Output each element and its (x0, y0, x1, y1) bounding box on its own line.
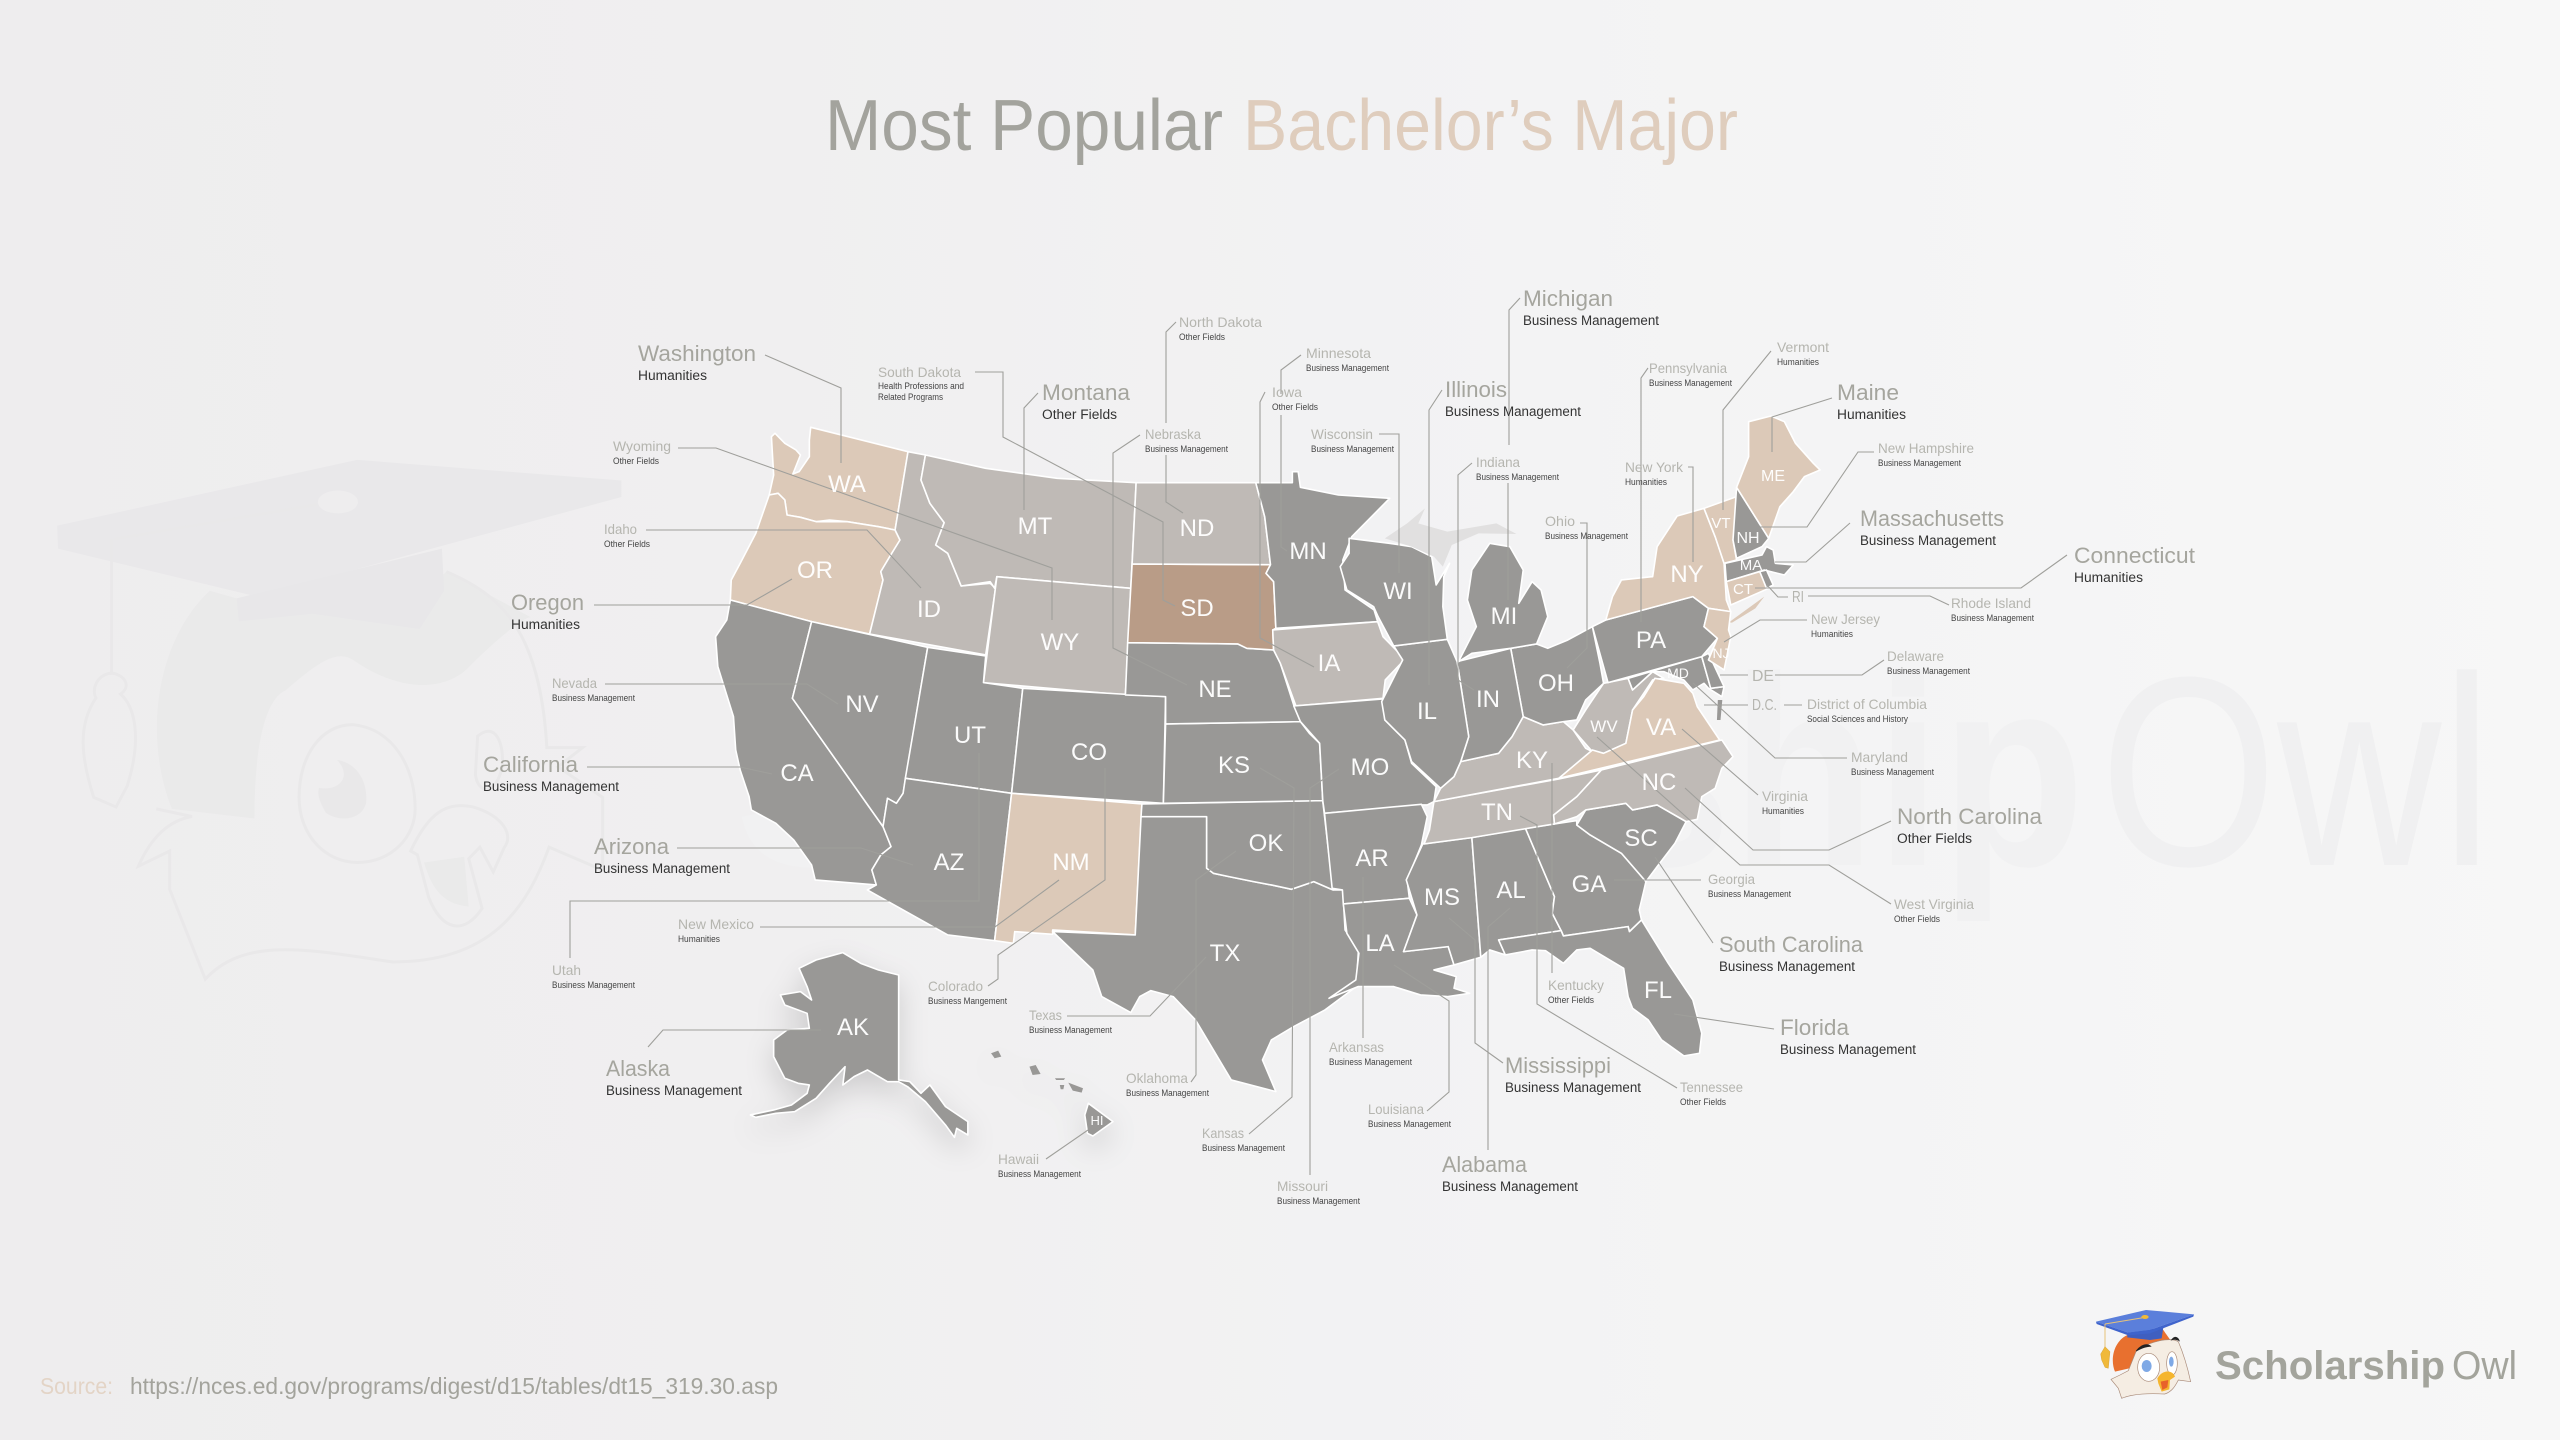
label Florida (1780, 1015, 1916, 1057)
state WV (1573, 672, 1664, 753)
label West Virginia (1894, 896, 1974, 924)
state CT (1726, 572, 1769, 605)
logo: ScholarshipOwl (2096, 1310, 2517, 1398)
state abbreviations: GA (1572, 871, 1606, 898)
label Washington: Washington (638, 341, 756, 366)
label Mississippi: Business Management (1505, 1080, 1641, 1095)
state abbreviations: WV (1590, 717, 1618, 736)
state abbreviations: MT (1018, 513, 1053, 540)
label Utah: Business Management (552, 980, 635, 990)
state WY (983, 577, 1131, 695)
state abbreviations: IA (1318, 650, 1340, 677)
label Delaware (1887, 648, 1970, 676)
label Nebraska: Business Management (1145, 444, 1228, 454)
label Arizona: Business Management (594, 861, 730, 876)
source line: Source: (40, 1373, 113, 1399)
source line: https://nces.ed.gov/programs/digest/d15/tables/dt15_319.30.asp (130, 1373, 778, 1399)
label Illinois: Illinois (1445, 377, 1507, 402)
label Maryland (1851, 749, 1934, 777)
label Maine: Humanities (1837, 407, 1906, 422)
state abbreviations: WY (1041, 629, 1079, 656)
label Colorado: Business Mangement (928, 996, 1007, 1006)
label Tennessee (1680, 1079, 1743, 1107)
label South Dakota (878, 364, 964, 402)
state abbreviations: TN (1481, 799, 1513, 826)
state abbreviations: FL (1644, 977, 1672, 1004)
label Mississippi (1505, 1053, 1641, 1095)
label District of Columbia (1807, 696, 1927, 724)
label Nevada: Nevada (552, 675, 597, 691)
state abbreviations: MO (1351, 754, 1389, 781)
label Louisiana: Business Management (1368, 1119, 1451, 1129)
label Oklahoma: Oklahoma (1126, 1070, 1188, 1086)
large state labels (483, 286, 2195, 1194)
state NM (995, 793, 1142, 943)
label New York: Humanities (1625, 477, 1667, 487)
label West Virginia: West Virginia (1894, 896, 1974, 912)
state NY long island (1729, 597, 1764, 623)
label South Carolina: South Carolina (1719, 932, 1864, 957)
state MD (1628, 657, 1724, 697)
state abbreviations: MS (1424, 884, 1460, 911)
label Alabama: Business Management (1442, 1179, 1578, 1194)
label Montana: Other Fields (1042, 407, 1117, 422)
map: Alaska and Hawaii with shadow (750, 953, 1113, 1137)
label Vermont: Humanities (1777, 357, 1819, 367)
state abbreviations: MD (1667, 665, 1689, 681)
label North Dakota (1179, 314, 1262, 342)
label Georgia: Business Management (1708, 889, 1791, 899)
label Oregon (511, 590, 584, 632)
label Tennessee: Other Fields (1680, 1097, 1726, 1107)
label Minnesota: Business Management (1306, 363, 1389, 373)
state abbreviations: AK (837, 1014, 869, 1041)
label Oregon: Oregon (511, 590, 584, 615)
label Wisconsin (1311, 426, 1394, 454)
state abbreviations: NJ (1712, 645, 1730, 661)
label New Hampshire: Business Management (1878, 458, 1961, 468)
label Maryland: Maryland (1851, 749, 1908, 765)
label Nevada: Business Management (552, 693, 635, 703)
state abbreviations: OR (797, 557, 833, 584)
map: contiguous states east (1294, 416, 1820, 1056)
label Indiana: Business Management (1476, 472, 1559, 482)
state MT (921, 455, 1136, 588)
state TN (1424, 770, 1601, 844)
label District of Columbia: Social Sciences and History (1807, 714, 1908, 724)
state abbreviations: NY (1670, 561, 1704, 588)
label Mississippi: Mississippi (1505, 1053, 1611, 1078)
label California: California (483, 752, 579, 777)
state abbreviations: NE (1198, 676, 1232, 703)
state WI (1340, 538, 1450, 646)
label Ohio (1545, 513, 1628, 541)
label Texas: Texas (1029, 1007, 1062, 1023)
label Idaho (604, 521, 650, 549)
state abbreviations: HI (1090, 1113, 1104, 1128)
state abbreviations: VT (1711, 515, 1731, 532)
state abbreviations: UT (954, 722, 986, 749)
label Ohio: Business Management (1545, 531, 1628, 541)
label Maine (1837, 380, 1906, 422)
label Michigan (1523, 286, 1659, 328)
label Nebraska: Nebraska (1145, 426, 1201, 442)
label Arizona (594, 834, 730, 876)
label Kansas: Kansas (1202, 1125, 1244, 1141)
label Virginia (1762, 788, 1808, 816)
state abbreviations: AR (1355, 845, 1389, 872)
map: contiguous states west (716, 427, 1403, 1092)
state NV (792, 622, 928, 827)
label Hawaii: Business Management (998, 1169, 1081, 1179)
small state labels (552, 314, 2034, 1206)
label Connecticut: Humanities (2074, 570, 2143, 585)
label Georgia: Georgia (1708, 871, 1755, 887)
state SC (1577, 803, 1686, 882)
label Alaska: Business Management (606, 1083, 742, 1098)
label Kentucky: Kentucky (1548, 977, 1604, 993)
label Arkansas (1329, 1039, 1412, 1067)
label Wyoming (613, 438, 671, 466)
watermark: brand wordmark: Owl (2100, 622, 2492, 923)
state ND (1132, 483, 1270, 565)
label New Jersey: New Jersey (1811, 611, 1880, 627)
state RI (1760, 570, 1773, 588)
label Connecticut: Connecticut (2074, 543, 2195, 568)
label Maine: Maine (1837, 380, 1899, 405)
label Colorado: Colorado (928, 978, 983, 994)
label Louisiana: Louisiana (1368, 1101, 1424, 1117)
label Texas: Business Management (1029, 1025, 1112, 1035)
label Michigan: Business Management (1523, 313, 1659, 328)
state HI islands (991, 1051, 1083, 1093)
label Missouri: Missouri (1277, 1178, 1328, 1194)
state abbreviations: ME (1761, 468, 1785, 485)
state FL (1499, 920, 1702, 1056)
label Georgia (1708, 871, 1791, 899)
state NJ (1704, 608, 1731, 670)
label Maryland: Business Management (1851, 767, 1934, 777)
label Minnesota (1306, 345, 1389, 373)
label DE: DE (1752, 668, 1774, 685)
label Massachusetts: Massachusetts (1860, 506, 2004, 531)
label South Carolina: Business Management (1719, 959, 1855, 974)
label Virginia: Virginia (1762, 788, 1808, 804)
state UT (905, 647, 1023, 793)
label Massachusetts: Business Management (1860, 533, 1996, 548)
state abbreviations: SC (1624, 825, 1658, 852)
label Kentucky: Other Fields (1548, 995, 1594, 1005)
label North Dakota: North Dakota (1179, 314, 1262, 330)
label Hawaii: Hawaii (998, 1151, 1039, 1167)
state abbreviations: OH (1538, 670, 1574, 697)
label Massachusetts (1860, 506, 2004, 548)
label New York: New York (1625, 459, 1684, 475)
state abbreviations: NV (845, 691, 879, 718)
label Iowa: Iowa (1272, 384, 1302, 400)
label Pennsylvania (1649, 360, 1732, 388)
label Ohio: Ohio (1545, 513, 1575, 529)
state IN (1457, 648, 1523, 762)
label Rhode Island: Rhode Island (1951, 595, 2031, 611)
label Montana: Montana (1042, 380, 1131, 405)
label Delaware: Delaware (1887, 648, 1944, 664)
logo wordmark: Scholarship (2215, 1344, 2445, 1388)
state NH (1733, 487, 1769, 558)
state VA eastern shore (1717, 700, 1722, 720)
label Washington: Humanities (638, 368, 707, 383)
watermark: brand wordmark: Scholarship (735, 622, 2085, 924)
icon: owl mascot (2096, 1310, 2194, 1398)
state abbreviations: NM (1052, 849, 1090, 876)
state abbreviations: KY (1516, 747, 1548, 774)
state abbreviations: CO (1071, 739, 1107, 766)
logo wordmark light: Owl (2452, 1344, 2517, 1388)
state OK (1141, 801, 1333, 890)
state MN (1256, 472, 1390, 628)
label Rhode Island (1951, 595, 2034, 623)
state abbreviations: SD (1180, 595, 1214, 622)
state PA (1592, 597, 1717, 683)
label Texas (1029, 1007, 1112, 1035)
label North Carolina (1897, 804, 2043, 846)
label Utah: Utah (552, 962, 581, 978)
state MO (1294, 699, 1436, 813)
leader lines (570, 298, 2067, 1175)
title: Bachelor’s Major (1243, 86, 1738, 166)
label Alabama: Alabama (1442, 1152, 1528, 1177)
label South Carolina (1719, 932, 1864, 974)
label New Hampshire: New Hampshire (1878, 440, 1974, 456)
state VA (1559, 678, 1720, 778)
state LA (1329, 898, 1470, 998)
state GA (1525, 821, 1646, 936)
label Illinois: Business Management (1445, 404, 1581, 419)
label Oklahoma: Business Management (1126, 1088, 1209, 1098)
label Kansas: Business Management (1202, 1143, 1285, 1153)
state NE (1125, 643, 1300, 724)
state abbreviations: WI (1383, 578, 1413, 605)
state VT (1704, 497, 1737, 563)
state OR (730, 493, 900, 634)
label Connecticut (2074, 543, 2195, 585)
state abbreviations: OK (1249, 830, 1283, 857)
state AK (750, 953, 968, 1137)
label Louisiana (1368, 1101, 1451, 1129)
label Alaska: Alaska (606, 1056, 671, 1081)
state abbreviations (780, 468, 1785, 1128)
label Missouri: Business Management (1277, 1196, 1360, 1206)
label Alabama (1442, 1152, 1578, 1194)
label Idaho: Other Fields (604, 539, 650, 549)
state abbreviations: CA (780, 760, 814, 787)
label New Jersey (1811, 611, 1880, 639)
state abbreviations: NC (1642, 769, 1676, 796)
label South Dakota: South Dakota (878, 364, 961, 380)
state MS (1404, 838, 1481, 965)
state abbreviations: ID (917, 596, 941, 623)
label Virginia: Humanities (1762, 806, 1804, 816)
state ID (870, 452, 996, 655)
label Hawaii (998, 1151, 1081, 1179)
state AR (1325, 804, 1427, 904)
state abbreviations: LA (1365, 930, 1395, 957)
label New Mexico: Humanities (678, 934, 720, 944)
label Utah (552, 962, 635, 990)
label Colorado (928, 978, 1007, 1006)
label Nevada (552, 675, 635, 703)
label Iowa: Other Fields (1272, 402, 1318, 412)
state abbreviations: TX (1210, 940, 1240, 967)
label D.C.: D.C. (1752, 697, 1777, 714)
state abbreviations: AL (1496, 877, 1526, 904)
label Idaho: Idaho (604, 521, 637, 537)
state NC (1554, 740, 1733, 824)
state CA (716, 600, 891, 885)
state abbreviations: MN (1289, 538, 1327, 565)
label North Carolina: North Carolina (1897, 804, 2043, 829)
state abbreviations: CT (1733, 581, 1753, 598)
label Washington (638, 341, 756, 383)
label RI: RI (1792, 589, 1804, 606)
label New York (1625, 459, 1684, 487)
watermark: owl mascot (57, 460, 621, 979)
label Arkansas: Arkansas (1329, 1039, 1384, 1055)
label Tennessee: Tennessee (1680, 1079, 1743, 1095)
label California (483, 752, 619, 794)
label Illinois (1445, 377, 1581, 419)
state CO (1012, 688, 1166, 803)
label Wisconsin: Business Management (1311, 444, 1394, 454)
state abbreviations: MA (1740, 557, 1762, 574)
label Rhode Island: Business Management (1951, 613, 2034, 623)
label West Virginia: Other Fields (1894, 914, 1940, 924)
label Kentucky (1548, 977, 1604, 1005)
label California: Business Management (483, 779, 619, 794)
label South Dakota: Health Professions and (878, 381, 964, 391)
state abbreviations: IN (1476, 686, 1500, 713)
label Montana (1042, 380, 1131, 422)
state abbreviations: ND (1180, 515, 1214, 542)
state KY (1434, 717, 1592, 802)
state HI (1085, 1103, 1113, 1136)
state OH (1511, 627, 1604, 725)
label New Mexico: New Mexico (678, 916, 754, 932)
state IL (1382, 639, 1469, 788)
label North Carolina: Other Fields (1897, 831, 1972, 846)
state TX (1053, 817, 1358, 1092)
state abbreviations: MI (1491, 603, 1517, 630)
label North Dakota: Other Fields (1179, 332, 1225, 342)
state abbreviations: IL (1417, 698, 1437, 725)
state SD (1128, 564, 1276, 650)
label Vermont (1777, 339, 1829, 367)
label Arkansas: Business Management (1329, 1057, 1412, 1067)
state ME (1737, 416, 1820, 538)
state abbreviations: AZ (934, 849, 964, 876)
label Alaska (606, 1056, 742, 1098)
state abbreviations: KS (1218, 752, 1250, 779)
label Indiana (1476, 454, 1559, 482)
label Florida: Business Management (1780, 1042, 1916, 1057)
state KS (1163, 722, 1323, 803)
label New Mexico (678, 916, 754, 944)
label Arizona: Arizona (594, 834, 670, 859)
label Wyoming: Other Fields (613, 456, 659, 466)
label Vermont: Vermont (1777, 339, 1829, 355)
state MA (1725, 547, 1793, 582)
state MI upper (1385, 508, 1517, 567)
label Oklahoma (1126, 1070, 1209, 1098)
label Missouri (1277, 1178, 1360, 1206)
label Wyoming: Wyoming (613, 438, 671, 454)
state IA (1273, 622, 1403, 706)
state WA (769, 427, 908, 530)
label Kansas (1202, 1125, 1285, 1153)
state abbreviations: WA (828, 471, 866, 498)
label New Jersey: Humanities (1811, 629, 1853, 639)
title: Most Popular (825, 86, 1223, 166)
label Indiana: Indiana (1476, 454, 1520, 470)
label Michigan: Michigan (1523, 286, 1613, 311)
state MI lower (1458, 543, 1548, 662)
state AL (1472, 828, 1561, 957)
label Wisconsin: Wisconsin (1311, 426, 1373, 442)
label Oregon: Humanities (511, 617, 580, 632)
label Minnesota: Minnesota (1306, 345, 1371, 361)
state NY (1606, 508, 1731, 620)
state AZ (867, 778, 1012, 941)
label Pennsylvania: Pennsylvania (1649, 360, 1727, 376)
label Delaware: Business Management (1887, 666, 1970, 676)
state abbreviations: PA (1636, 627, 1666, 654)
label South Dakota: Related Programs (878, 392, 943, 402)
label District of Columbia: District of Columbia (1807, 696, 1927, 712)
state DE (1702, 653, 1724, 688)
label Iowa (1272, 384, 1318, 412)
label Nebraska (1145, 426, 1228, 454)
state abbreviations: NH (1736, 530, 1760, 547)
state abbreviations: VA (1646, 714, 1676, 741)
title (825, 86, 1738, 166)
label New Hampshire (1878, 440, 1974, 468)
label Florida: Florida (1780, 1015, 1850, 1040)
label Pennsylvania: Business Management (1649, 378, 1732, 388)
